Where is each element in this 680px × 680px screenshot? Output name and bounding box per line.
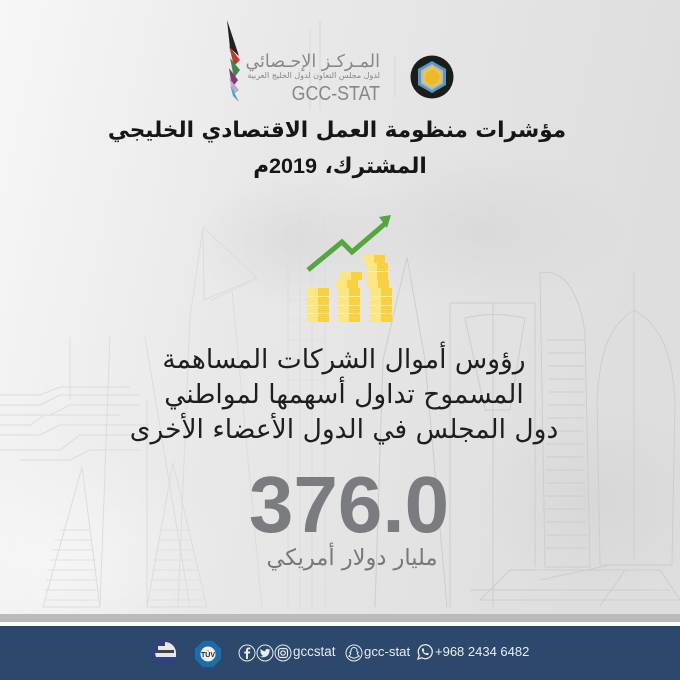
- description line 1: رؤوس أموال الشركات المساهمة: [162, 344, 526, 375]
- footer gray stripe: [0, 614, 680, 622]
- logo: GCC-STAT ribbon mark: [227, 20, 240, 102]
- big number: 376.0: [249, 460, 449, 549]
- logo: GCC emblem: [410, 56, 454, 98]
- handle: gcc-stat: gcc-stat: [364, 644, 410, 659]
- icon: ISO badge: [152, 640, 178, 666]
- title: [108, 118, 566, 179]
- icon: instagram: [274, 644, 292, 662]
- icon: whatsapp: [417, 644, 433, 660]
- footer white stripe: [0, 622, 680, 626]
- right skyline: [375, 257, 680, 607]
- phone number: +968 2434 6482: [435, 644, 529, 659]
- description line 2: المسموح تداول أسهمها لمواطني: [164, 379, 524, 410]
- icon: snapchat: [346, 644, 362, 662]
- description text: [130, 342, 558, 445]
- logo Arabic subtitle: لدول مجلس التعاون لدول الخليج العربية: [247, 71, 380, 80]
- title line 2: المشترك، 2019م: [253, 153, 427, 179]
- description line 3: دول المجلس في الدول الأعضاء الأخرى: [130, 414, 558, 445]
- handle: gccstat: gccstat: [293, 644, 335, 659]
- logo: GCC-STAT wordmark: [245, 52, 380, 105]
- left skyline: [0, 20, 395, 607]
- icon: TUV badge: TÜV: [201, 650, 215, 659]
- unit label: مليار دولار أمريكي: [266, 545, 438, 571]
- icon: facebook: [238, 644, 256, 662]
- icon: TUV badge: [195, 641, 221, 667]
- icon: twitter: [256, 644, 274, 662]
- footer bar: [0, 626, 680, 680]
- green arrow: [308, 222, 387, 270]
- icon: rising gold coin stacks with green arrow: [306, 215, 392, 322]
- logo Arabic name: المـركـز الإحـصائي: [245, 52, 380, 72]
- title line 1: مؤشرات منظومة العمل الاقتصادي الخليجي: [108, 118, 566, 143]
- logo English name: GCC-STAT: [292, 83, 380, 105]
